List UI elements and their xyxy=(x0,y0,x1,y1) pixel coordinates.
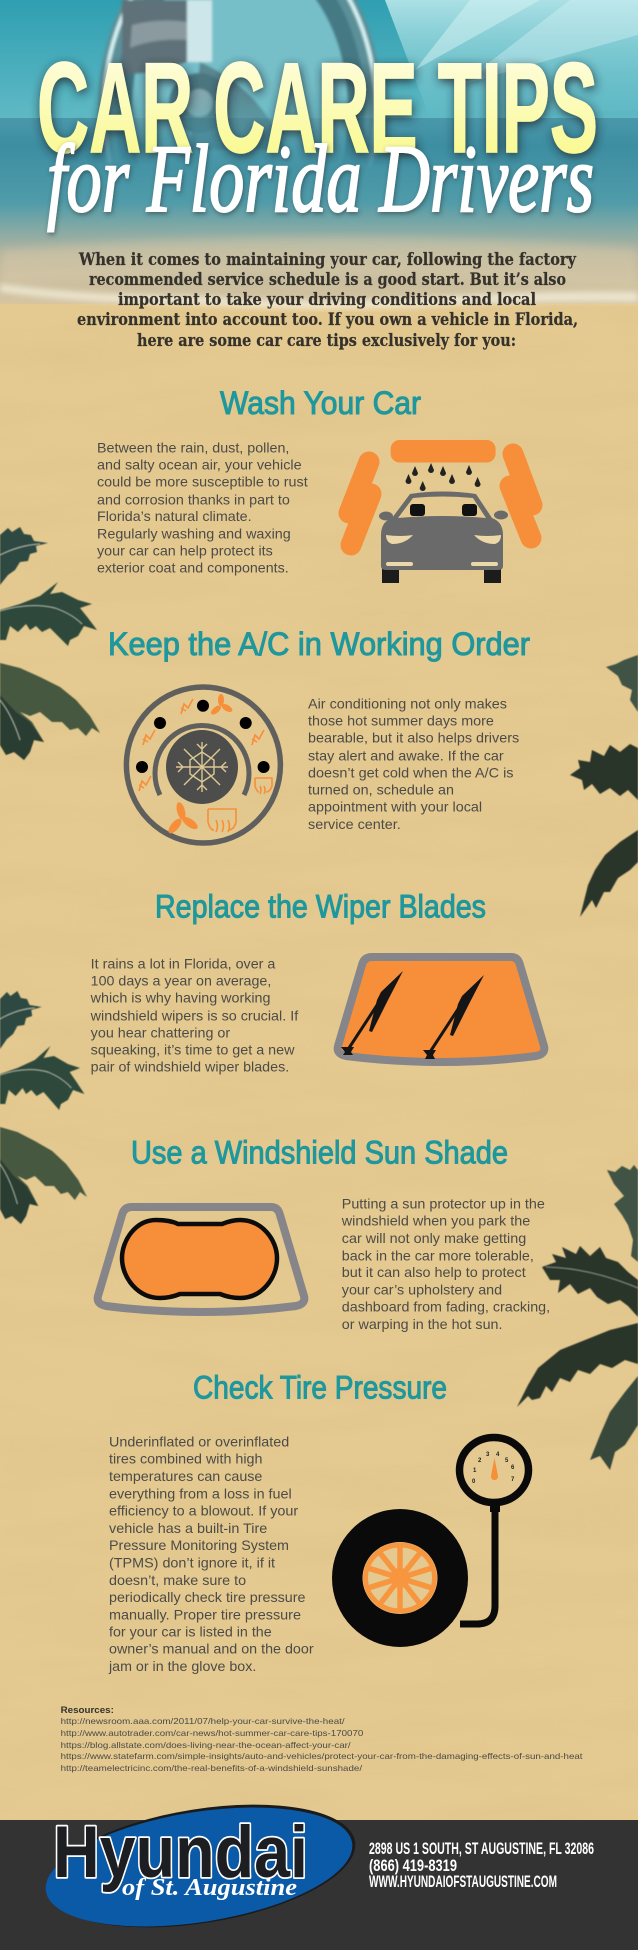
footer band xyxy=(0,1785,638,1950)
text: sun shade: but it can also help to protect xyxy=(342,1264,526,1280)
icon: climate control dial xyxy=(126,687,280,843)
panel: wash your car xyxy=(97,385,532,583)
text: sun shade: windshield when you park the xyxy=(341,1212,530,1228)
text: wash your car: Regularly washing and waxing xyxy=(97,525,291,541)
text: tire pressure xyxy=(108,1434,314,1674)
dealer contact details xyxy=(369,1839,594,1891)
logo: Hyundai of St. Augustine: Hyundai xyxy=(53,1812,308,1893)
text: wash your car: and corrosion thanks in part to xyxy=(97,491,290,507)
icon: tire with pressure gauge: 4 xyxy=(496,1452,500,1458)
text: A/C: turned on, schedule an xyxy=(308,782,454,798)
icon: car wash xyxy=(349,440,532,583)
resources: http://newsroom.aaa.com/2011/07/help-your-car-survive-the-heat/ xyxy=(61,1716,345,1726)
text: sun shade: or warping in the hot sun. xyxy=(342,1316,502,1332)
intro text: important to take your driving conditions and local xyxy=(118,290,536,310)
text: A/C: doesn’t get cold when the A/C is xyxy=(308,764,514,780)
text: sun shade: car will not only make getting xyxy=(342,1230,526,1246)
text: sun shade: Putting a sun protector up in the xyxy=(342,1196,545,1212)
panel: replace the wiper blades xyxy=(90,888,544,1074)
text: wash your car: Between the rain, dust, pollen, xyxy=(97,439,289,455)
panel: check tire pressure xyxy=(108,1369,528,1674)
text: sun shade xyxy=(341,1196,550,1332)
intro text xyxy=(77,250,578,351)
icon: large fan xyxy=(166,801,200,835)
text: wiper blades: It rains a lot in Florida, over a xyxy=(91,955,276,971)
text: tire pressure: owner’s manual and on the door xyxy=(109,1641,314,1657)
foam edge xyxy=(0,284,638,309)
text: tire pressure: tires combined with high xyxy=(109,1451,262,1467)
background: ocean and wheel scene xyxy=(0,0,638,309)
text: A/C: those hot summer days more xyxy=(308,712,494,728)
icon: tire with pressure gauge: 7 xyxy=(511,1477,515,1483)
heading: wash your car: Wash Your Car xyxy=(220,385,421,421)
icon: windshield with sun shade xyxy=(98,1207,304,1312)
text: A/C: service center. xyxy=(308,816,401,832)
icon: tire with pressure gauge: 1 xyxy=(473,1468,477,1474)
text: wiper blades: squeaking, it’s time to get a new xyxy=(91,1042,295,1058)
heading: sun shade: Use a Windshield Sun Shade xyxy=(131,1134,508,1170)
icon: windshield with wipers xyxy=(338,957,544,1062)
text: tire pressure: temperatures can cause xyxy=(109,1468,263,1484)
text: tire pressure: everything from a loss in fuel xyxy=(109,1486,292,1502)
text: wiper blades: you hear chattering or xyxy=(91,1024,231,1040)
text: wiper blades xyxy=(90,955,298,1074)
resources: https://www.statefarm.com/simple-insights/auto-and-vehicles/protect-your-car-from-the-damaging-effects-of-sun-and-heat xyxy=(61,1751,583,1761)
text: wash your car: could be more susceptible to rust xyxy=(97,474,308,490)
resources xyxy=(61,1705,583,1773)
text: wiper blades: pair of windshield wiper blades. xyxy=(91,1058,289,1074)
text: wash your car: exterior coat and components. xyxy=(97,560,289,576)
text: tire pressure: efficiency to a blowout. If your xyxy=(109,1503,299,1519)
text: A/C: bearable, but it also helps drivers xyxy=(308,730,519,746)
panel: use a windshield sun shade xyxy=(98,1134,550,1332)
logo: Hyundai of St. Augustine: of St. Augustine xyxy=(122,1875,297,1901)
panel: keep the A/C in working order xyxy=(108,626,530,843)
logo: Hyundai of St. Augustine xyxy=(37,1785,364,1947)
text: A/C: Air conditioning not only makes xyxy=(308,696,507,712)
resources: http://teamelectricinc.com/the-real-benefits-of-a-windshield-sunshade/ xyxy=(61,1763,363,1773)
icon: tire with pressure gauge: 5 xyxy=(505,1458,509,1464)
icon: small fan xyxy=(209,694,234,716)
text: tire pressure: for your car is listed in the xyxy=(109,1623,272,1639)
icon: tire with pressure gauge xyxy=(332,1438,528,1647)
palm: lower left xyxy=(0,991,87,1224)
text: wiper blades: 100 days a year on average, xyxy=(91,972,271,988)
resources: https://blog.allstate.com/does-living-near-the-ocean-affect-your-car/ xyxy=(61,1740,351,1750)
intro text: here are some car care tips exclusively for you: xyxy=(137,331,516,351)
text: A/C xyxy=(308,696,519,832)
dealer contact details: (866) 419-8319 xyxy=(369,1856,457,1875)
icon: tire with pressure gauge: 2 xyxy=(478,1458,482,1464)
palm: lower right xyxy=(517,1165,638,1470)
text: tire pressure: Pressure Monitoring System xyxy=(109,1537,289,1553)
icon: seat airflow marks xyxy=(139,699,264,791)
text: sun shade: your car’s upholstery and xyxy=(342,1282,502,1298)
heading: tire pressure: Check Tire Pressure xyxy=(193,1369,447,1405)
text: tire pressure: manually. Proper tire pressure xyxy=(109,1606,301,1622)
icon: tire with pressure gauge: 6 xyxy=(511,1465,515,1471)
text: A/C: appointment with your local xyxy=(308,799,482,815)
text: wiper blades: which is why having working xyxy=(90,990,271,1006)
text: A/C: stay alert and awake. If the car xyxy=(308,747,504,763)
text: tire pressure: (TPMS) don’t ignore it, if it xyxy=(109,1554,275,1570)
icon: tire with pressure gauge: 0 xyxy=(472,1479,476,1485)
palm: upper left xyxy=(0,527,100,760)
icon: defrost xyxy=(208,778,272,832)
heading: wiper blades: Replace the Wiper Blades xyxy=(155,888,486,924)
heading: A/C: Keep the A/C in Working Order xyxy=(108,626,530,662)
text: wash your car: Florida’s natural climate. xyxy=(97,508,252,524)
text: tire pressure: vehicle has a built-in Tire xyxy=(109,1520,268,1536)
text: wash your car: and salty ocean air, your vehicle xyxy=(97,456,302,472)
text: sun shade: back in the car more tolerable, xyxy=(342,1247,534,1263)
text: wash your car: your car can help protect its xyxy=(97,543,273,559)
text: tire pressure: doesn’t, make sure to xyxy=(109,1572,246,1588)
palm: upper right xyxy=(570,655,638,917)
resources: http://www.autotrader.com/car-news/hot-summer-car-care-tips-170070 xyxy=(61,1728,364,1738)
text: sun shade: dashboard from fading, cracking, xyxy=(342,1299,550,1315)
icon: tire with pressure gauge: 3 xyxy=(486,1452,490,1458)
text: tire pressure: jam or in the glove box. xyxy=(108,1658,256,1674)
text: wiper blades: windshield wipers is so crucial. If xyxy=(90,1007,298,1023)
text: wash your car xyxy=(97,439,308,576)
resources: Resources: xyxy=(61,1705,114,1715)
text: tire pressure: periodically check tire pressure xyxy=(109,1589,306,1605)
text: tire pressure: Underinflated or overinflated xyxy=(109,1434,289,1450)
